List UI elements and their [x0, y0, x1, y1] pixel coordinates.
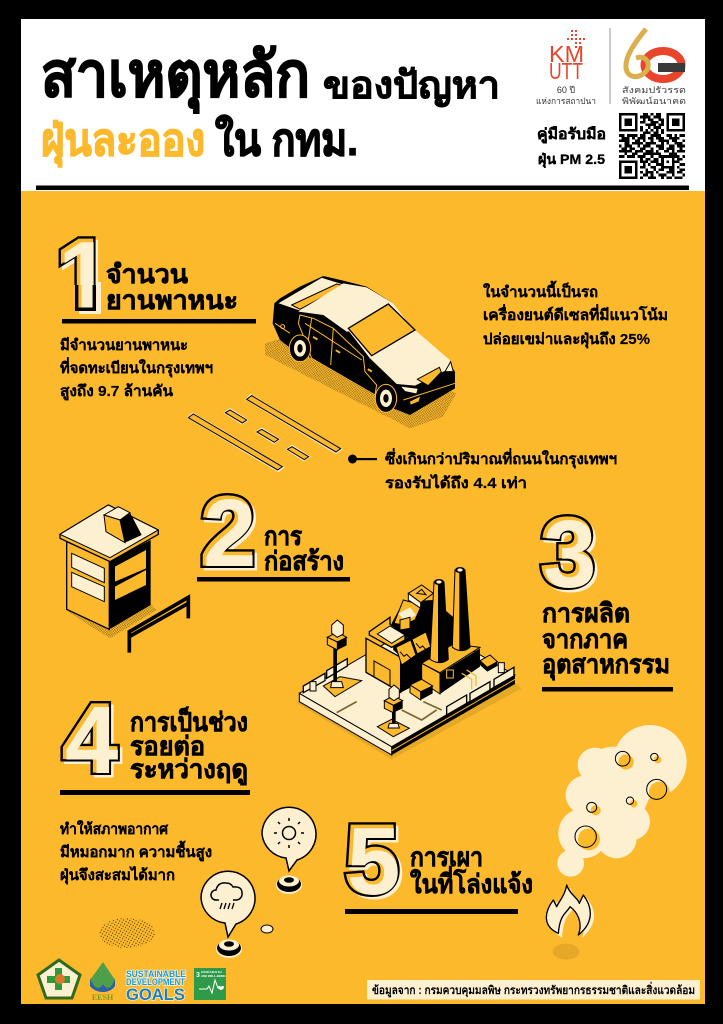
- section 3: heading: จากภาค: [542, 624, 628, 654]
- title line 2: ฝุ่นละออง: [41, 116, 205, 168]
- diesel note: เครื่องยนต์ดีเซลที่มีแนวโน้ม: [483, 304, 668, 324]
- icon: building: [60, 505, 188, 653]
- section 4: body text: [60, 820, 212, 885]
- section 4: body text: ฝุ่นจึงสะสมได้มาก: [60, 865, 175, 885]
- icon: flame: [546, 885, 594, 960]
- logo: SDG 3: GOOD HEALTH: [201, 970, 221, 974]
- section 3: number: 3: [543, 501, 596, 608]
- source note: [367, 980, 700, 1000]
- road capacity text: ซึ่งเกินกว่าปริมาณที่ถนนในกรุงเทพฯ: [385, 448, 617, 469]
- title line 2: [41, 114, 358, 168]
- logo: 60th anniversary: [622, 29, 686, 106]
- section 5: number: 5: [345, 806, 398, 913]
- logo: 60th anniversary: สังคมปรัวรรต: [622, 85, 686, 95]
- icon: smoke cloud: [557, 725, 687, 877]
- logo: sustainable development goals: [126, 969, 186, 1004]
- section 2: heading: การ: [264, 521, 302, 551]
- logo: KMUTT: แห่งการสถาปนา: [536, 96, 596, 106]
- panel: header: [21, 19, 705, 191]
- section 1: body text: สูงถึง 9.7 ล้านคัน: [60, 382, 174, 401]
- road capacity text: รองรับได้ถึง 4.4 เท่า: [385, 473, 527, 492]
- section 5: number: 5: [345, 806, 398, 913]
- section 2: number: 2: [201, 478, 254, 585]
- section 5: number: 5: [348, 809, 401, 916]
- section 4: number: 4: [63, 685, 116, 792]
- icon: rain bubble: [201, 871, 273, 958]
- section 4: body text: ทำให้สภาพอากาศ: [60, 820, 168, 838]
- logo: 60th anniversary: พิพัฒน์อนาคต: [622, 96, 686, 106]
- title line 2: ใน กทม.: [215, 114, 358, 165]
- section 4: heading: ระหว่างฤดู: [130, 754, 248, 786]
- section 4: number: 4: [65, 687, 118, 794]
- logo: EESH: [90, 962, 115, 1002]
- title line 1: ของปัญหา: [323, 65, 500, 107]
- section 5: heading: ในที่โล่งแจ้ง: [410, 865, 533, 899]
- section 1: number: 1: [56, 220, 109, 327]
- logo: KMUTT: KM: [549, 41, 584, 67]
- section 4: heading: การเป็นช่วง: [130, 706, 248, 737]
- logo: SDG 3: [194, 968, 226, 1000]
- section 3: number: 3: [544, 502, 597, 609]
- section 4: number: 4: [63, 685, 116, 792]
- dot shadow: [99, 918, 155, 948]
- section 2: number: 2: [203, 480, 256, 587]
- section 1: number: [58, 236, 101, 314]
- logo: sustainable development goals: DEVELOPMENT: [126, 977, 185, 987]
- logo: KMUTT: UTT: [549, 58, 583, 84]
- section 3: number: 3: [541, 499, 594, 606]
- section 2: heading: [197, 521, 350, 582]
- section 1: number: 1: [56, 220, 109, 327]
- section 3: heading: [542, 598, 673, 692]
- section 1: heading: จำนวน: [106, 259, 188, 289]
- logo: KMUTT: 60 ปี: [557, 85, 575, 95]
- logo: KMUTT: [536, 30, 596, 106]
- icon: factory: [297, 567, 522, 759]
- title line 1: [41, 41, 500, 113]
- section 2: number: 2: [201, 478, 254, 585]
- logo: SDG 3: 3: [196, 972, 200, 979]
- logo: EESH: EESH: [92, 993, 114, 1002]
- icon: car: [265, 276, 457, 428]
- diesel note: [483, 280, 668, 349]
- logo: health care unit: [38, 960, 80, 998]
- section 5: heading: [345, 842, 533, 914]
- section 4: number: 4: [66, 688, 119, 795]
- handbook label: [537, 126, 606, 168]
- logo: sustainable development goals: GOALS: [126, 985, 185, 1004]
- section 3: heading: การผลิต: [542, 598, 630, 628]
- icon: road markings: [187, 394, 343, 472]
- section 3: heading: อุตสาหกรรม: [542, 649, 670, 681]
- QR code: [619, 114, 685, 178]
- section 1: heading: ยานพาหนะ: [106, 285, 238, 315]
- section 1: body text: ที่จดทะเบียนในกรุงเทพฯ: [60, 357, 213, 378]
- section 2: heading: ก่อสร้าง: [264, 546, 344, 576]
- section 1: body text: มีจำนวนยานพาหนะ: [60, 337, 188, 354]
- logo: sustainable development goals: SUSTAINABLE: [126, 969, 186, 979]
- panel: yellow main area: [21, 191, 705, 1004]
- section 4: heading: [60, 706, 250, 795]
- section 1: number: 1: [59, 223, 112, 330]
- section 4: heading: รอยต่อ: [130, 731, 205, 761]
- handbook label: คู่มือรับมือ: [537, 126, 606, 144]
- section 1: heading: [62, 259, 256, 324]
- section 4: body text: มีหมอกมาก ความชื้นสูง: [60, 840, 212, 862]
- logo: SDG 3: AND WELL-BEING: [201, 974, 226, 978]
- section 1: number: 1: [58, 222, 111, 329]
- title line 1: สาเหตุหลัก: [41, 41, 310, 113]
- diesel note: ปล่อยเขม่าและฝุ่นถึง 25%: [483, 330, 650, 349]
- icon: sun bubble: [262, 807, 316, 894]
- section 3: number: 3: [541, 499, 594, 606]
- section 5: heading: การเผา: [410, 842, 483, 872]
- diesel note: ในจำนวนนี้เป็นรถ: [483, 280, 598, 301]
- section 5: number: 5: [347, 808, 400, 915]
- section 2: number: 2: [204, 481, 257, 588]
- connector: road capacity: [348, 454, 377, 464]
- section 1: body text: [60, 337, 213, 401]
- road capacity text: [385, 448, 617, 492]
- handbook label: ฝุ่น PM 2.5: [538, 151, 605, 168]
